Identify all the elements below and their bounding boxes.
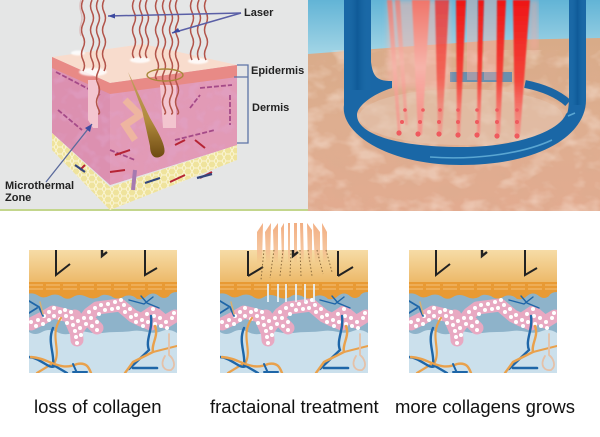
microthermal columns: [88, 80, 176, 128]
channels: [268, 284, 314, 302]
bracket: epidermis and dermis: [234, 65, 248, 143]
panel: laser applicator on skin: [308, 0, 600, 211]
panel: skin block diagram: [0, 0, 308, 210]
blue ring and posts: [344, 0, 586, 165]
panel: loss of collagen: [27, 250, 177, 373]
panel: more collagens grows: [407, 250, 557, 373]
hairs: first and last panels: [56, 250, 537, 275]
hairs: [248, 251, 353, 276]
label: Microthermal Zone: Microthermal: [5, 180, 74, 192]
microthermal arrow: [46, 124, 92, 182]
beam target dots: [396, 108, 520, 139]
hair follicle: [110, 36, 165, 158]
laser arrows: [108, 13, 241, 33]
caption: fractaional treatment: fractaional treatment: [210, 396, 379, 417]
skin block: [52, 44, 237, 210]
beam entry halos: [71, 50, 208, 76]
label: Epidermis: Epidermis: [251, 65, 304, 77]
caption: loss of collagen: loss of collagen: [34, 396, 162, 417]
back of ring: [450, 72, 568, 103]
epidermis ring: [147, 69, 183, 81]
panel: fractional treatment: [218, 223, 368, 373]
dotted paths: [261, 250, 332, 280]
label: Dermis: Dermis: [252, 102, 289, 114]
label: Microthermal Zone: Zone: [5, 192, 31, 204]
caption: more collagens grows: more collagens grows: [395, 396, 575, 417]
label: Laser: Laser: [244, 7, 274, 19]
laser beams: [387, 0, 538, 139]
laser fan: [257, 223, 327, 264]
laser waves: [80, 0, 208, 114]
